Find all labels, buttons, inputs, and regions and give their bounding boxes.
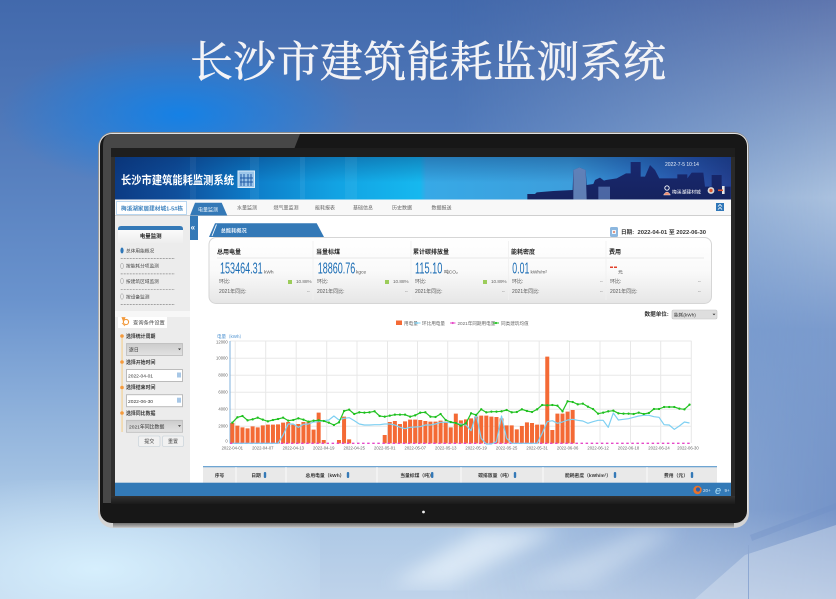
KPI: standard coal: kgce <box>356 270 366 276</box>
x axis labels: 2022-05-01 <box>374 446 396 451</box>
KPI: total electricity: kWh <box>264 270 274 276</box>
x axis labels: 2022-04-07 <box>252 446 274 451</box>
chart legend: 同类建筑均值 <box>501 320 529 327</box>
data table header: 能耗密度（kWh/m²） <box>565 472 611 479</box>
chart legend: 环比用电量 <box>422 320 445 327</box>
y axis title: 电量（kWh） <box>217 333 244 340</box>
line: peer building average <box>232 401 690 426</box>
period select: 逐日 <box>129 346 139 354</box>
x axis labels: 2022-06-30 <box>677 446 699 451</box>
KPI: carbon emissions: 10.89% <box>491 279 507 284</box>
KPI: standard coal: 当量标煤 <box>316 248 340 256</box>
query conditions panel <box>115 311 190 446</box>
user info <box>664 186 701 196</box>
menu items: 总体用能概况 <box>126 247 154 254</box>
KPI: total electricity: 10.88% <box>296 279 312 284</box>
line: month on month <box>232 413 690 444</box>
KPI: carbon emissions: -- <box>502 289 505 294</box>
tablet black frame <box>100 134 747 523</box>
KPI: cost: 元 <box>618 270 623 276</box>
footer bar <box>115 483 731 497</box>
tabs: 基础信息 <box>353 204 373 212</box>
KPI: energy density <box>511 248 603 295</box>
KPI: energy density: 环比: <box>512 278 523 285</box>
KPI: energy density: -- <box>600 279 603 284</box>
tablet device <box>98 132 749 528</box>
KPI: standard coal: 10.88% <box>393 279 409 284</box>
x axis labels: 2022-04-25 <box>343 446 366 451</box>
query conditions panel: 选择结束时间 <box>126 384 155 391</box>
camera dot <box>422 511 425 513</box>
x axis labels: 2022-06-12 <box>587 446 609 451</box>
data table header: 总用电量（kWh） <box>306 472 344 479</box>
date range <box>610 227 706 237</box>
x axis labels: 2022-04-01 <box>222 446 244 451</box>
title: 长沙市建筑能耗监测系统 <box>190 39 666 87</box>
KPI: cost <box>609 248 701 295</box>
reset button: 重置 <box>168 438 178 445</box>
menu items: 按能耗分项监测 <box>126 263 159 270</box>
sidebar menu card <box>118 226 183 305</box>
icon: firefox <box>693 486 702 494</box>
data table header: 当量标煤（吨） <box>400 472 434 479</box>
icon: ie browser: e <box>715 485 721 497</box>
date range: 2022-04-01 至 2022-06-30 <box>638 229 706 236</box>
x axis labels: 2022-06-06 <box>557 446 579 451</box>
y axis: 6000 <box>218 390 228 394</box>
icon: search <box>122 318 129 326</box>
y axis <box>216 340 230 444</box>
collapse sidebar button <box>190 216 198 240</box>
x axis labels: 2022-06-24 <box>648 446 670 451</box>
chart legend: 用电量 <box>404 320 418 327</box>
tablet silver bezel <box>98 132 749 528</box>
data table header: 序号 <box>215 472 224 479</box>
building selector <box>116 202 186 214</box>
y axis: 10000 <box>216 356 228 360</box>
collapse toggle <box>716 203 724 211</box>
system header banner <box>115 157 731 200</box>
query conditions panel: 查询条件设置 <box>133 318 165 326</box>
tabs: 能耗报表 <box>315 204 335 212</box>
x axis labels: 2022-05-31 <box>526 446 548 451</box>
KPI: total electricity: 153464.31 <box>220 261 263 278</box>
query conditions panel: 选择开始时间 <box>126 359 155 366</box>
KPI: total electricity: 总用电量 <box>217 248 241 256</box>
chart legend <box>396 320 529 327</box>
data table header: 碳排放量（吨） <box>478 472 512 479</box>
tabs: 数据报送 <box>431 204 452 212</box>
panel: KPI summary <box>209 238 712 304</box>
section tab: overview: 总能耗概况 <box>221 226 247 234</box>
header skyline <box>527 162 731 199</box>
KPI: energy density: -- <box>600 289 603 294</box>
footer bar: 9+ <box>724 488 730 493</box>
x axis labels: 2022-04-13 <box>283 446 305 451</box>
KPI: standard coal: -- <box>405 289 408 294</box>
data unit selector: 能耗(kWh) <box>674 312 696 318</box>
start date input: 2022-04-01 <box>128 374 153 380</box>
x axis labels: 2022-04-19 <box>313 446 335 451</box>
data table header: 日期 <box>251 472 261 479</box>
KPI: standard coal: 2021年同比: <box>317 288 345 295</box>
tabs <box>237 204 452 212</box>
KPI: standard coal <box>316 248 409 295</box>
menu items <box>120 247 159 300</box>
footer bar: 20+ <box>703 488 711 493</box>
tabs: 燃气量监测 <box>273 204 299 212</box>
x axis labels: 2022-06-18 <box>618 446 640 451</box>
KPI: energy density: kWh/m² <box>530 270 547 276</box>
KPI: carbon emissions: 115.10 <box>415 261 442 278</box>
x axis labels: 2022-05-19 <box>465 446 487 451</box>
chart: electricity trend <box>216 320 699 451</box>
y axis: 12000 <box>216 340 228 344</box>
navigation bar <box>115 200 731 216</box>
KPI: cost: 环比: <box>610 278 621 285</box>
header title: 长沙市建筑能耗监测系统 <box>121 173 234 187</box>
date time: 2022-7-5 10:14 <box>665 162 699 168</box>
user info: 梅溪湖建材城 <box>672 188 701 196</box>
icon: settings <box>708 187 714 194</box>
sidebar <box>115 216 190 483</box>
section tab: overview <box>209 223 324 237</box>
x axis labels: 2022-05-07 <box>404 446 427 451</box>
tabs: 水量监测 <box>237 204 257 212</box>
data table header <box>203 466 717 483</box>
KPI: carbon emissions: 环比: <box>415 278 426 285</box>
query conditions panel: 选择统计周期 <box>126 333 155 340</box>
y axis: 8000 <box>218 372 228 378</box>
end date input: 2022-06-30 <box>128 399 153 405</box>
icon: exit <box>718 186 725 194</box>
KPI: standard coal: 环比: <box>317 278 328 285</box>
chart legend: 2021年同期用电量 <box>458 320 496 327</box>
chart grid <box>230 341 692 443</box>
x axis labels: 2022-05-13 <box>435 446 457 451</box>
KPI: cost: 费用 <box>609 248 621 256</box>
KPI: energy density: 能耗密度 <box>511 248 535 256</box>
KPI: total electricity: 2021年同比: <box>219 288 247 295</box>
active tab <box>190 203 227 216</box>
KPI: energy density: 0.01 <box>512 261 529 278</box>
KPI: carbon emissions <box>413 248 507 295</box>
KPI: carbon emissions: 吨CO₂ <box>444 269 458 276</box>
submit button: 提交 <box>144 438 154 445</box>
screen <box>115 157 731 497</box>
data table header: 费用（元） <box>664 472 688 479</box>
KPI: total electricity: -- <box>307 289 310 294</box>
KPI: carbon emissions: 2021年同比: <box>415 288 443 295</box>
y axis: 0 <box>225 438 228 444</box>
line: 2021 same period <box>230 442 690 444</box>
menu items: 按建筑区域监测 <box>126 278 159 285</box>
KPI: total electricity <box>217 248 312 295</box>
bars: electricity use <box>232 357 573 443</box>
icon: building <box>238 171 254 188</box>
menu items: 按设备监测 <box>126 293 150 300</box>
x axis labels: 2022-05-25 <box>496 446 518 451</box>
KPI: energy density: 2021年同比: <box>512 288 540 295</box>
tabs: 历史数据 <box>392 204 412 212</box>
sidebar menu card: 电量监测 <box>140 232 162 240</box>
x axis labels <box>222 446 699 451</box>
date range: 日期: <box>621 228 634 236</box>
KPI: total electricity: 环比: <box>219 278 230 285</box>
building selector: 梅溪湖家居建材城1-5#栋 <box>121 204 183 212</box>
KPI: carbon emissions: 累计碳排放量 <box>413 248 449 256</box>
KPI: cost: 2021年同比: <box>610 288 638 295</box>
active tab: 电量监测 <box>198 206 218 214</box>
KPI: standard coal: 18860.76 <box>318 261 355 278</box>
collapse sidebar button: « <box>191 223 196 232</box>
query conditions panel: 选择同比数据 <box>126 410 155 417</box>
y axis: 2000 <box>218 424 228 428</box>
KPI: cost: -- <box>698 289 701 294</box>
data unit selector: 数据单位: <box>644 310 669 318</box>
data unit selector <box>644 310 717 319</box>
KPI: cost: -- <box>698 279 701 284</box>
compare select: 2021年同比数据 <box>129 423 164 430</box>
y axis: 4000 <box>218 406 228 412</box>
